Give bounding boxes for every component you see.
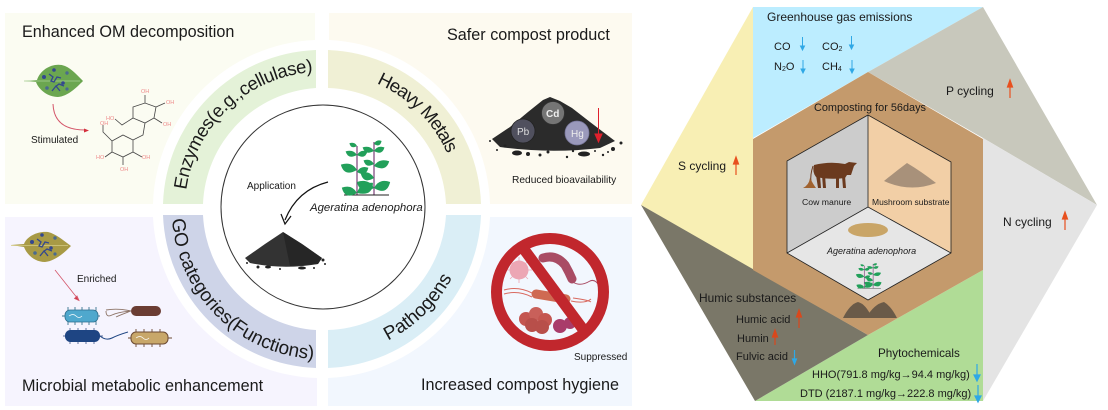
heading: Microbial metabolic enhancement: Microbial metabolic enhancement bbox=[22, 377, 264, 395]
arrow: application bbox=[281, 182, 328, 224]
heading: Enhanced OM decomposition: Enhanced OM decomposition bbox=[22, 23, 234, 41]
icon: compost mounds bbox=[843, 302, 897, 318]
label: N cycling: N cycling bbox=[1003, 215, 1052, 229]
label: HHO: HHO(791.8 mg/kg→94.4 mg/kg) bbox=[812, 369, 970, 381]
arrows: humic trends bbox=[772, 310, 802, 364]
cube face: Ageratina adenophora bbox=[787, 207, 951, 300]
heading: Composting for 56days: Composting for 56days bbox=[814, 102, 927, 114]
icon: disaccharide molecule: OH bbox=[163, 122, 171, 128]
icon: disaccharide molecule: OH bbox=[141, 89, 149, 95]
icon: disaccharide molecule bbox=[96, 89, 174, 173]
arrow: stimulated bbox=[53, 104, 89, 132]
icon: cow bbox=[803, 162, 857, 188]
gas labels: O bbox=[786, 61, 795, 73]
icon: disaccharide molecule: OH bbox=[142, 155, 150, 161]
gas labels: CO bbox=[774, 41, 791, 53]
label: Enriched: Enriched bbox=[77, 274, 116, 285]
heading: Greenhouse gas emissions: Greenhouse gas emissions bbox=[767, 10, 912, 24]
arrows: decrease bbox=[974, 364, 981, 402]
arrows: gases decrease bbox=[800, 36, 854, 73]
arrow: up bbox=[734, 157, 738, 175]
cube face: cow manure bbox=[787, 115, 868, 253]
label: P cycling: P cycling bbox=[946, 84, 994, 98]
ring segment: heavy metals bbox=[328, 50, 481, 204]
icon: chopped straw bbox=[848, 223, 888, 237]
cube face: mushroom substrate bbox=[868, 115, 951, 253]
icon: compost pile bbox=[245, 232, 326, 270]
label: Humic substances: Humic substances bbox=[699, 291, 796, 305]
label: Stimulated: Stimulated bbox=[31, 135, 78, 146]
heading: Safer compost product: Safer compost product bbox=[447, 26, 610, 44]
panel: increased compost hygiene bbox=[328, 217, 632, 406]
icon: compost with heavy metals: Pb bbox=[517, 127, 530, 138]
icon: Ageratina plant bbox=[341, 140, 390, 196]
hexagon: S cycling bbox=[641, 7, 753, 270]
icon: disaccharide molecule: HO bbox=[96, 155, 105, 161]
icon: pathogens prohibited bbox=[496, 238, 604, 346]
ring segment: heavy metals: Heavy Metals bbox=[378, 72, 455, 152]
panel: safer compost product bbox=[329, 13, 632, 204]
label: Cow manure: Cow manure bbox=[802, 197, 851, 207]
arrow: decrease bbox=[595, 108, 602, 142]
label: Ageratina adenophora: Ageratina adenophora bbox=[826, 246, 916, 256]
label: Application: Application bbox=[247, 181, 296, 192]
label: Mushroom substrate: Mushroom substrate bbox=[872, 197, 950, 207]
icon: green leaf bbox=[24, 65, 83, 97]
label: Reduced bioavailability: Reduced bioavailability bbox=[512, 175, 617, 186]
gas labels: 2 bbox=[838, 46, 842, 53]
label: Fulvic acid: Fulvic acid bbox=[736, 351, 788, 363]
panel: enhanced OM decomposition bbox=[5, 13, 315, 204]
icon: yellow leaf bbox=[11, 232, 71, 262]
label: Suppressed: Suppressed bbox=[574, 352, 627, 363]
label: Humic acid: Humic acid bbox=[736, 314, 790, 326]
ring segment: enzymes: Enzymes(e.g.,cellulase) bbox=[174, 59, 312, 188]
gas labels: N bbox=[774, 61, 782, 73]
label: species name: Ageratina adenophora bbox=[309, 202, 423, 214]
hexagon: humic substances bbox=[641, 205, 868, 401]
label: S cycling: S cycling bbox=[678, 159, 726, 173]
panel: microbial metabolic enhancement bbox=[5, 217, 317, 406]
icon: small plant bbox=[856, 263, 882, 289]
arrow: up bbox=[1062, 212, 1068, 230]
icon: compost with heavy metals: Cd bbox=[546, 109, 559, 120]
icon: disaccharide molecule: OH bbox=[120, 167, 128, 173]
ring segment: GO categories: GO categories(Functions) bbox=[172, 219, 313, 362]
gas labels: 2 bbox=[782, 66, 786, 73]
hexagon: phytochemicals bbox=[755, 270, 983, 402]
icon: bacteria bbox=[62, 306, 172, 347]
gas labels bbox=[774, 41, 842, 73]
icon: mushroom substrate pile bbox=[884, 163, 936, 188]
label: Phytochemicals: Phytochemicals bbox=[878, 347, 960, 360]
gas labels: CH bbox=[822, 61, 838, 73]
label: DTD: DTD (2187.1 mg/kg→222.8 mg/kg) bbox=[800, 388, 971, 400]
hexagon: composting core bbox=[753, 72, 983, 335]
gas labels: 4 bbox=[838, 66, 842, 73]
hexagon: greenhouse gas emissions bbox=[753, 7, 983, 138]
ring segment: pathogens: Pathogens bbox=[383, 274, 451, 340]
label: Humin: Humin bbox=[737, 333, 769, 345]
icon: compost with heavy metals bbox=[489, 97, 622, 158]
ring segment: pathogens bbox=[328, 215, 481, 368]
icon: disaccharide molecule: OH bbox=[166, 100, 174, 106]
arrow: enriched bbox=[55, 270, 79, 300]
icon: disaccharide molecule: OH bbox=[100, 121, 108, 127]
center circle bbox=[221, 105, 425, 309]
hexagon: N cycling bbox=[983, 138, 1097, 401]
gas labels: CO bbox=[822, 41, 838, 53]
icon: disaccharide molecule: HO bbox=[106, 116, 115, 122]
heading: Increased compost hygiene: Increased compost hygiene bbox=[421, 376, 619, 394]
cube outline bbox=[787, 115, 951, 300]
arrow: up bbox=[1008, 80, 1012, 98]
icon: compost with heavy metals: Hg bbox=[571, 129, 584, 140]
hexagon: P cycling bbox=[868, 7, 1097, 205]
